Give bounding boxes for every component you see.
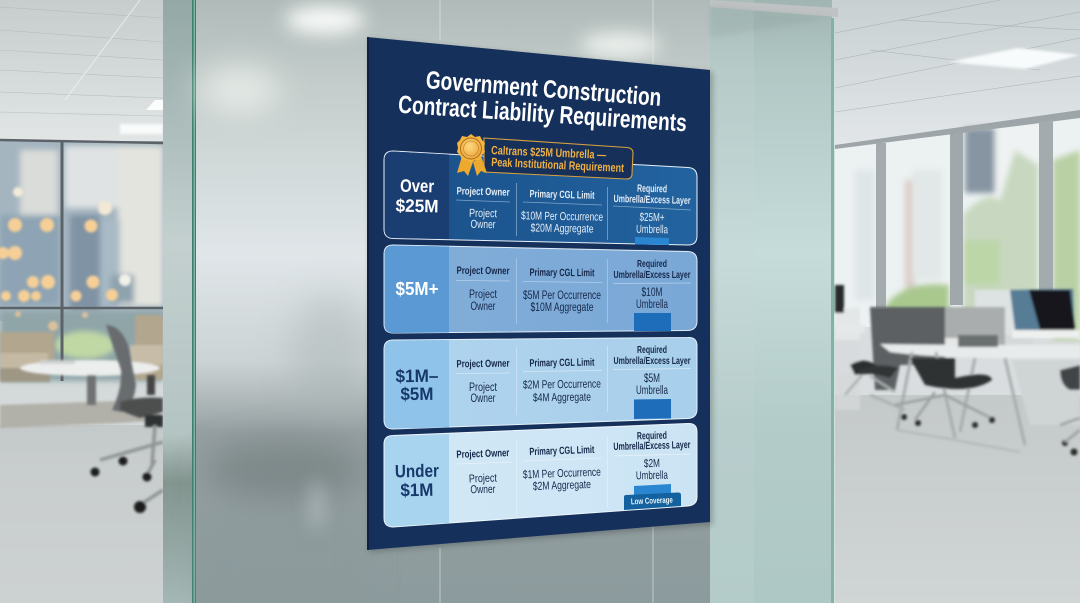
tier label: Under $1M: $1M — [400, 480, 434, 500]
umbrella column: Required — [637, 183, 667, 195]
primary CGL column: $2M Per Occurrence — [523, 378, 601, 392]
umbrella column: Umbrella/Excess Layer — [614, 355, 690, 367]
frosted glass main panel — [196, 0, 710, 603]
project owner column: Project — [469, 472, 498, 485]
umbrella column: Umbrella — [636, 299, 668, 311]
umbrella column: Required — [637, 258, 667, 270]
umbrella column — [613, 430, 691, 482]
umbrella column — [613, 258, 691, 311]
right office background — [830, 0, 1080, 603]
tier label: Over $25M: $25M — [395, 196, 439, 216]
floor and rug — [0, 400, 163, 603]
callout: Caltrans badge — [484, 138, 633, 179]
coverage bar — [634, 399, 671, 419]
project owner column — [456, 358, 510, 405]
row: $5M+ — [384, 245, 697, 333]
desks, chairs and monitors — [835, 285, 1080, 456]
primary CGL column — [523, 267, 602, 314]
ceiling light panel — [949, 48, 1080, 69]
tier label: $5M+: $5M+ — [396, 279, 438, 299]
column dividers — [516, 346, 608, 415]
primary CGL column: Primary CGL Limit — [529, 357, 595, 369]
primary CGL column: Primary CGL Limit — [529, 444, 595, 458]
floor — [835, 395, 1080, 603]
low coverage tag — [624, 492, 681, 510]
umbrella column: Umbrella/Excess Layer — [614, 269, 690, 281]
low coverage tag: Low Coverage — [631, 495, 673, 506]
primary CGL column: $10M Per Occurrence — [521, 210, 603, 224]
tier label: Over $25M: Over — [400, 176, 434, 196]
tier label: $5M+ — [384, 246, 449, 333]
callout: Caltrans badge: Caltrans $25M Umbrella — — [491, 143, 606, 162]
primary CGL column: Primary CGL Limit — [529, 188, 595, 202]
column dividers — [516, 436, 608, 515]
round table — [20, 360, 160, 405]
project owner column — [456, 265, 510, 313]
tier label: $1M–$5M: $1M– — [395, 366, 439, 386]
tier label: Over $25M — [384, 152, 449, 239]
project owner column: Project Owner — [456, 358, 510, 370]
primary CGL column: $5M Per Occurrence — [523, 290, 601, 302]
primary CGL column: $2M Aggregate — [533, 479, 591, 493]
office chair — [90, 325, 163, 513]
umbrella column: $25M+ — [639, 212, 665, 224]
umbrella column: Umbrella — [636, 470, 668, 482]
row: Over $25M — [384, 151, 697, 245]
left office background — [0, 0, 170, 603]
primary CGL column: $1M Per Occurrence — [523, 467, 601, 481]
umbrella column — [613, 183, 691, 236]
column dividers — [516, 258, 608, 324]
umbrella column: $5M — [644, 373, 660, 385]
umbrella column: Required — [637, 344, 667, 356]
title: Government Construction — [425, 66, 662, 112]
tier label: Under $1M — [384, 434, 449, 526]
windows with greenery — [835, 110, 1080, 340]
primary CGL column: $10M Aggregate — [530, 302, 594, 314]
project owner column: Owner — [470, 484, 496, 496]
icon: gold award medal — [457, 134, 487, 176]
primary CGL column — [523, 444, 602, 493]
umbrella column: Umbrella/Excess Layer — [613, 439, 691, 453]
umbrella column: Umbrella — [636, 224, 669, 236]
glass partition — [163, 0, 838, 603]
sofa and armchair — [0, 315, 163, 382]
umbrella column: $10M — [642, 287, 662, 299]
project owner column: Project — [469, 208, 498, 220]
primary CGL column: $4M Aggregate — [533, 392, 591, 404]
umbrella column: $2M — [644, 458, 660, 470]
title: Contract Liability Requirements — [397, 91, 688, 137]
glass left edge strip — [163, 0, 192, 603]
umbrella column: Required — [637, 430, 667, 442]
row: $1M–$5M — [384, 337, 697, 429]
callout: Caltrans badge: Peak Institutional Requirement — [491, 155, 624, 175]
title — [397, 66, 688, 137]
project owner column: Project Owner — [456, 447, 510, 461]
coverage bar — [634, 313, 671, 331]
primary CGL column: Primary CGL Limit — [529, 267, 595, 279]
sign panel — [367, 37, 713, 552]
project owner column: Project Owner — [456, 265, 510, 277]
project owner column: Owner — [470, 219, 496, 231]
project owner column: Owner — [470, 393, 496, 405]
frosted glass right panel — [710, 0, 832, 603]
primary CGL column — [521, 188, 603, 236]
tier label: $1M–$5M: $5M — [400, 384, 434, 404]
primary CGL column — [523, 357, 602, 404]
project owner column — [456, 185, 510, 231]
column dividers — [516, 183, 608, 240]
project owner column: Project — [469, 289, 498, 301]
tier label: $1M–$5M — [384, 340, 449, 428]
project owner column: Project — [469, 382, 498, 394]
top rail — [710, 0, 838, 17]
window with city view — [0, 140, 163, 381]
primary CGL column: $20M Aggregate — [530, 222, 594, 236]
coverage bar — [634, 484, 671, 496]
project owner column — [456, 447, 512, 496]
tier label: Under $1M: Under — [395, 461, 439, 481]
row: Under $1M — [384, 423, 697, 527]
coverage bar — [635, 237, 669, 245]
project owner column: Project Owner — [456, 185, 510, 199]
project owner column: Owner — [470, 301, 496, 313]
umbrella column: Umbrella/Excess Layer — [613, 193, 691, 207]
umbrella column: Umbrella — [636, 385, 668, 397]
umbrella column — [613, 344, 691, 397]
